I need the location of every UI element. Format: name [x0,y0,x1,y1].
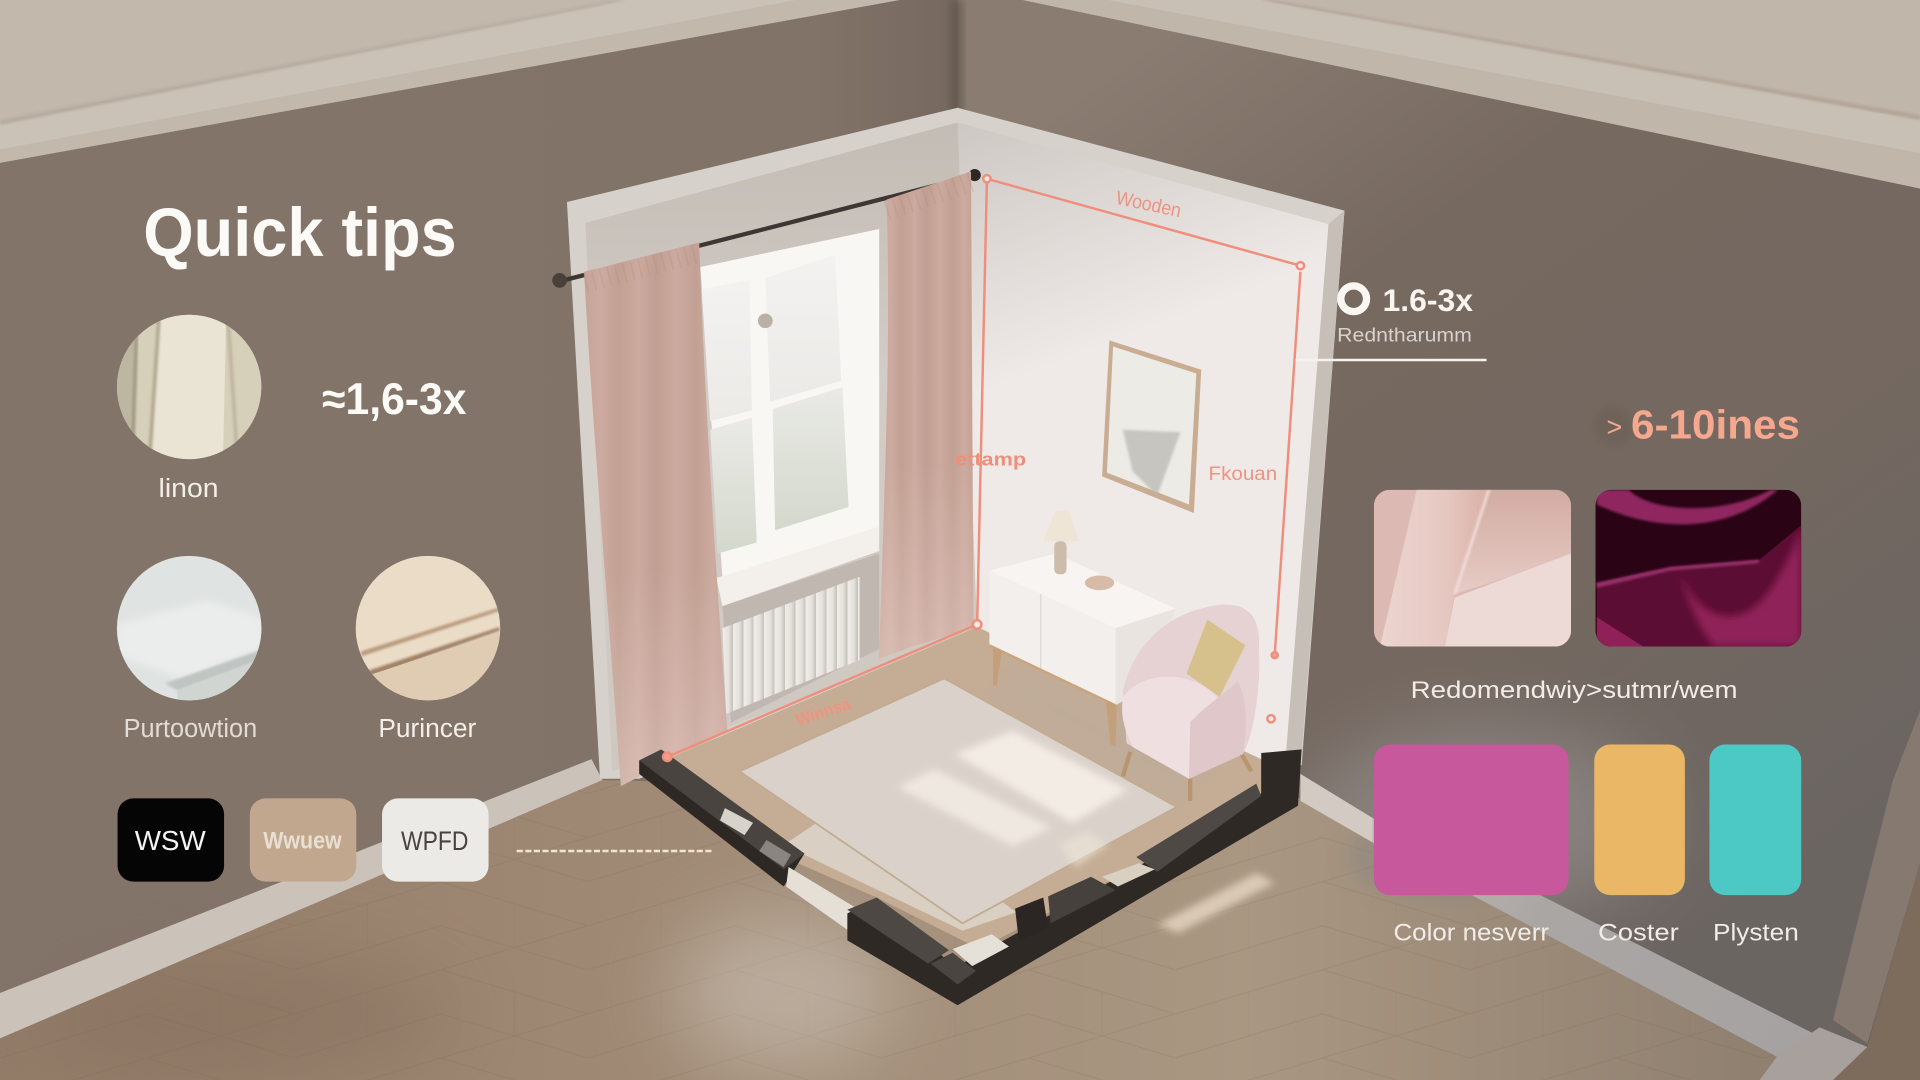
picture frame [1102,340,1201,513]
stat: 6-10 lines: > [1607,412,1622,442]
fabric image: burgundy velvet [1596,490,1801,647]
plinth base [639,749,1302,1005]
label: linen: linon [159,475,219,503]
floor inside room [639,627,1261,949]
measurement label: floor: Winnsa [793,693,853,730]
radiator [722,577,860,714]
fabric image: pale pink [1374,490,1571,647]
measurement label: top: Wooden [1114,187,1183,222]
callout: ring ratio [1296,282,1487,360]
bowl [1085,576,1114,590]
measurement lines [663,175,1304,761]
stat: fullness ratio: ≈1,6-3x [322,375,467,424]
lamp [1043,511,1079,574]
fabric swatch: white cotton [116,556,263,704]
right room wall [958,122,1329,759]
left curtain [584,242,727,786]
fabric swatch: linen [116,314,262,460]
dresser [989,553,1176,747]
label: beige: Purincer [378,715,477,743]
herringbone floor [0,780,1777,1080]
right curtain [879,171,973,659]
caption: recommended fabrics: Redomendwiy>sutmr/wem [1411,677,1738,704]
title: Quick tips [143,194,457,271]
room wall rim [1286,211,1344,757]
color swatch: teal [1709,744,1801,895]
callout: ring ratio: Redntharumm [1337,325,1472,347]
color swatch: magenta [1374,744,1569,895]
label: white cotton: Purtoowtion [124,715,257,743]
dashed leader line [517,850,714,852]
label: amber: Coster [1598,919,1679,946]
badge: black [118,798,224,882]
badge: white [382,798,489,882]
badge: tan [250,798,356,882]
badge: tan: Wwuew [263,828,342,855]
measurement label: right height: Fkouan [1209,463,1277,485]
badge: white: WPFD [401,826,468,856]
room outer walls [567,108,1344,779]
badge: black: WSW [135,825,206,856]
curtain rod [552,169,981,288]
color swatch: amber [1594,744,1685,895]
rug [740,678,1177,923]
measurement label: left height: ettamp [955,448,1026,469]
panel: corner room model [552,108,1344,1005]
callout: ring ratio: 1.6-3x [1382,282,1473,318]
fabric swatch: beige [355,556,502,704]
armchair [1122,605,1259,801]
stat: 6-10 lines: 6-10ines [1631,401,1800,447]
label: teal: Plysten [1713,919,1799,946]
window [700,229,879,606]
label: magenta: Color nesverr [1393,919,1549,946]
